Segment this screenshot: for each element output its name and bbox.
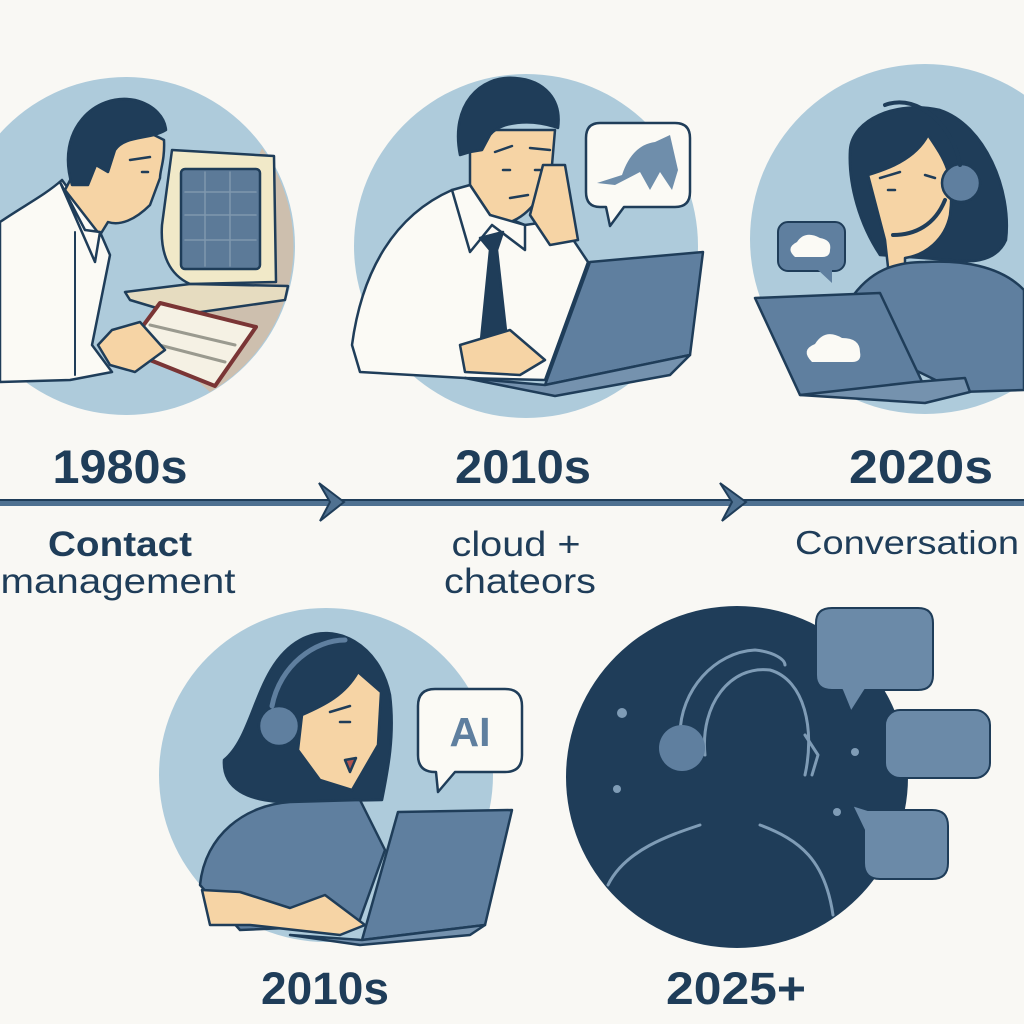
callout: speech bubble with creature (586, 123, 690, 226)
callout: cloud bubble (778, 222, 845, 283)
timeline arrow line (0, 483, 1024, 521)
icon: headset earpiece (659, 725, 705, 771)
heading: 2010s bottom: 2010s (261, 963, 389, 1014)
text block: cloud + chateors: cloud + (452, 525, 580, 564)
arrow: second (720, 483, 746, 521)
man on phone (352, 78, 588, 380)
icon: laptop (465, 252, 703, 396)
text block: cloud + chateors (444, 525, 596, 601)
text block: cloud + chateors: chateors (444, 562, 596, 601)
panel: 2025+ illustration (566, 606, 990, 948)
callout: AI bubble: AI (450, 709, 490, 755)
heading: 1980s: 1980s (52, 440, 188, 493)
woman with headset (850, 102, 1024, 392)
callout: AI bubble (418, 689, 522, 792)
panel: 2010s illustration (352, 74, 703, 418)
text block: contact management: management (0, 562, 236, 601)
heading: 2010s top: 2010s (455, 440, 591, 493)
icon: desktop computer (125, 150, 288, 315)
arrow: first (319, 483, 344, 521)
stars (613, 708, 859, 816)
panel: 1980s illustration (0, 77, 295, 415)
callout: middle bubble (885, 710, 990, 778)
panel: lower 2010s illustration (159, 608, 522, 945)
text block: conversation: Conversation (795, 524, 1019, 561)
text block: contact management (0, 525, 236, 601)
heading: 2020s: 2020s (849, 440, 993, 493)
woman with headset (200, 633, 392, 935)
silhouette with headset (608, 650, 833, 915)
callout: top bubble (816, 608, 933, 712)
panel: 2020s illustration (750, 64, 1024, 414)
man with white shirt (0, 99, 166, 382)
icon: laptop with cloud (755, 293, 970, 403)
heading: 2025+: 2025+ (666, 963, 806, 1014)
callout: bottom bubble (852, 805, 948, 879)
icon: laptop (290, 810, 512, 945)
text block: contact management: Contact (48, 525, 192, 564)
icon: open book (125, 303, 256, 386)
